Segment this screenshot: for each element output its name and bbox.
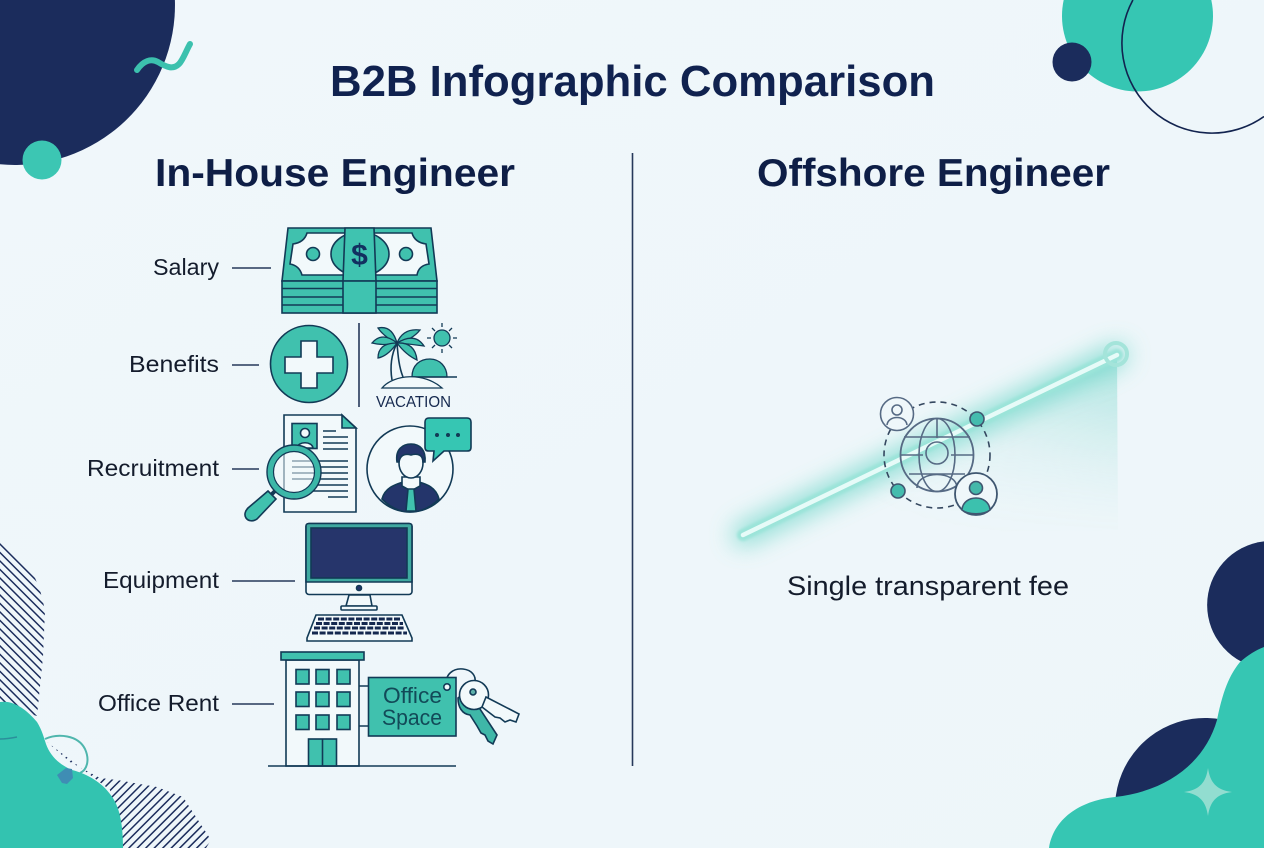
decoration: bottom-right shapes	[1049, 541, 1264, 848]
office space sign: Office	[383, 683, 442, 708]
label: office rent: Office Rent	[98, 690, 219, 716]
decoration: top-left shapes	[0, 0, 190, 180]
row: office rent	[98, 652, 519, 766]
icon: keys	[446, 669, 519, 744]
heading: in-house engineer: In-House Engineer	[155, 152, 515, 195]
icon: vacation island	[372, 323, 457, 388]
divider	[632, 153, 634, 766]
row: recruitment	[87, 415, 471, 521]
label: benefits: Benefits	[129, 351, 219, 377]
leader line: salary	[232, 267, 271, 269]
row: equipment	[103, 524, 412, 641]
caption: single transparent fee: Single transparent fee	[787, 571, 1069, 601]
icon: global network	[880, 398, 997, 515]
icon: resume with magnifier	[245, 415, 356, 521]
title: B2B Infographic Comparison	[330, 57, 935, 106]
separator	[358, 323, 360, 407]
office space sign: Space	[382, 705, 442, 730]
area under line	[956, 360, 1118, 490]
icon: stack of money: $	[351, 239, 368, 272]
office space sign	[368, 678, 456, 736]
row: salary	[153, 228, 437, 313]
label: salary: Salary	[153, 254, 219, 280]
label: equipment: Equipment	[103, 567, 219, 593]
label: recruitment: Recruitment	[87, 455, 219, 481]
icon: office building	[268, 652, 456, 766]
label: vacation: VACATION	[376, 394, 451, 411]
leader line: equipment	[232, 580, 295, 582]
icon: desktop computer	[306, 524, 412, 641]
icon: stack of money	[282, 228, 437, 313]
row: benefits	[129, 323, 457, 411]
heading: offshore engineer: Offshore Engineer	[757, 152, 1110, 195]
leader line: office rent	[232, 703, 274, 705]
leader line: benefits	[232, 364, 259, 366]
decoration: bottom-left shapes	[0, 540, 211, 848]
chart: glowing single-fee line	[743, 343, 1127, 535]
icon: medical cross	[270, 326, 348, 402]
decoration: top-right shapes	[1052, 0, 1264, 133]
leader line: recruitment	[232, 468, 259, 470]
icon: candidate with speech bubble	[367, 418, 471, 512]
